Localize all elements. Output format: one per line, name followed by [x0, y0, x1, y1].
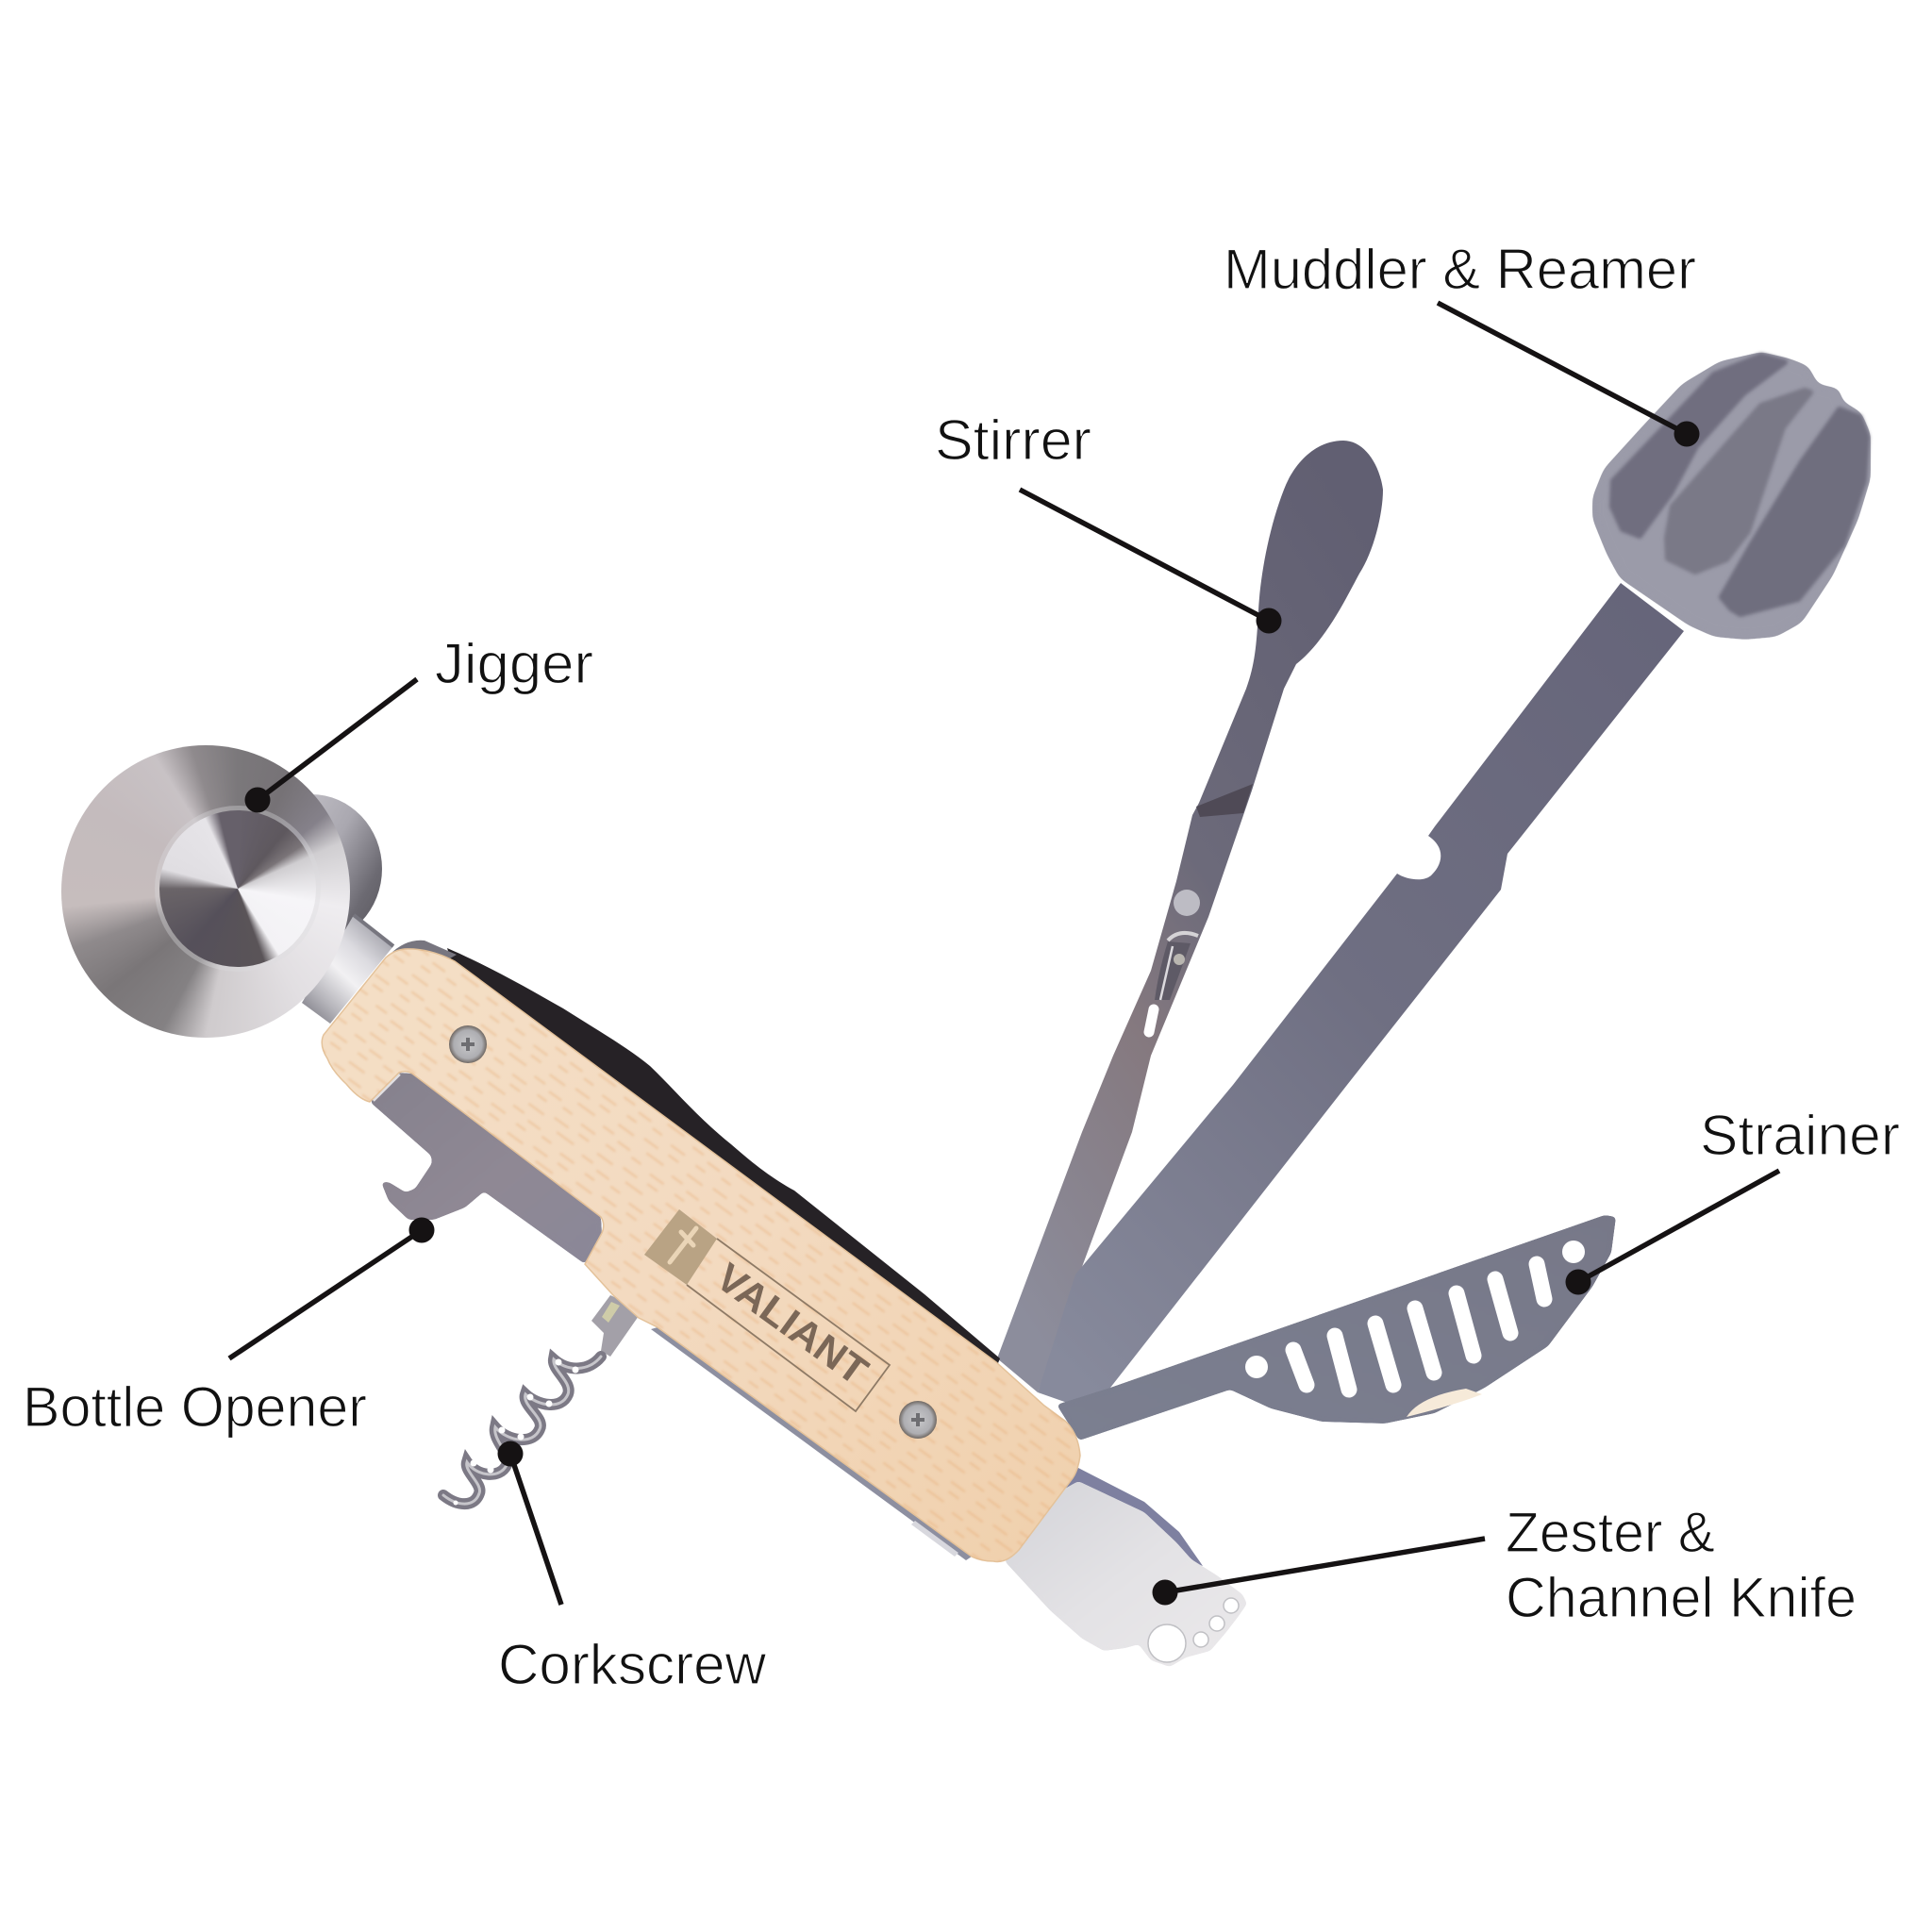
label: Muddler & Reamer	[1224, 238, 1700, 447]
muddler and reamer head	[1592, 352, 1871, 640]
label: Bottle Opener: Bottle Opener	[23, 1375, 367, 1439]
label: Jigger	[245, 632, 593, 813]
label: Stirrer: Stirrer	[935, 408, 1091, 472]
reamer groove right	[1722, 409, 1867, 614]
wooden handle	[311, 934, 1094, 1575]
leader: Zester & Channel Knife	[1153, 1539, 1485, 1606]
bottle opener	[370, 1073, 602, 1264]
label: Corkscrew: Corkscrew	[498, 1633, 767, 1696]
corkscrew spiral	[443, 1357, 601, 1504]
muddler and reamer shaft	[1038, 583, 1684, 1406]
handle liner	[390, 941, 457, 962]
strainer holes and slots	[1245, 1241, 1585, 1390]
stirrer bevel mark	[1196, 784, 1253, 817]
jigger rim and base	[61, 745, 350, 1038]
toe-shaped holes	[1148, 1598, 1239, 1662]
corkscrew stem	[591, 1295, 639, 1357]
label: Bottle Opener	[23, 1217, 434, 1439]
logo wordmark: VALIANT	[708, 1255, 876, 1393]
logo outline	[687, 1239, 890, 1411]
handle body	[322, 949, 1080, 1562]
label: Strainer: Strainer	[1700, 1104, 1900, 1167]
leader: Bottle Opener	[229, 1217, 434, 1358]
label: Muddler & Reamer: Muddler & Reamer	[1224, 238, 1696, 301]
label: Zester & Channel Knife: Channel Knife	[1506, 1566, 1857, 1629]
zester and channel knife	[1005, 1460, 1247, 1667]
screw bottom	[899, 1401, 937, 1439]
strainer crescent notch	[1407, 1389, 1482, 1417]
label: Zester & Channel Knife	[1153, 1501, 1857, 1629]
infographic: annotated bar multi-tool	[27, 248, 1898, 1684]
leader: Corkscrew	[498, 1441, 561, 1605]
corkscrew	[443, 1295, 639, 1506]
stirrer rivet	[1174, 890, 1200, 916]
jigger	[61, 745, 393, 1038]
jigger neck	[302, 915, 393, 1024]
leader: Strainer	[1566, 1171, 1779, 1294]
logo dagger	[670, 1228, 696, 1262]
zester blue back edge	[1066, 1460, 1203, 1566]
label: Zester & Channel Knife: Zester &	[1506, 1501, 1715, 1564]
leader: Stirrer	[1020, 490, 1281, 634]
label: Strainer	[1566, 1104, 1900, 1294]
under-handle silver sliver	[911, 1521, 958, 1557]
label: Stirrer	[935, 408, 1281, 634]
stirrer tool	[997, 441, 1383, 1392]
label: Corkscrew	[498, 1441, 767, 1696]
leader: Muddler & Reamer	[1438, 303, 1700, 447]
logo square	[644, 1209, 717, 1285]
screw top	[449, 1025, 487, 1063]
corkscrew beads	[453, 1358, 579, 1506]
stirrer spring clip	[1155, 933, 1198, 1000]
dark blade behind handle	[447, 948, 1000, 1368]
label: Jigger: Jigger	[435, 632, 593, 695]
strainer tool	[1057, 1215, 1616, 1441]
jigger back cup	[241, 794, 382, 943]
reamer groove middle	[1667, 391, 1810, 572]
under-handle steel edge	[651, 1327, 972, 1560]
leader: Jigger	[245, 679, 417, 813]
opener light edge	[373, 1074, 399, 1100]
wood grain	[311, 934, 1094, 1575]
reamer groove left	[1612, 356, 1785, 536]
stirrer slot	[1149, 1009, 1154, 1032]
zester body	[1005, 1481, 1247, 1667]
